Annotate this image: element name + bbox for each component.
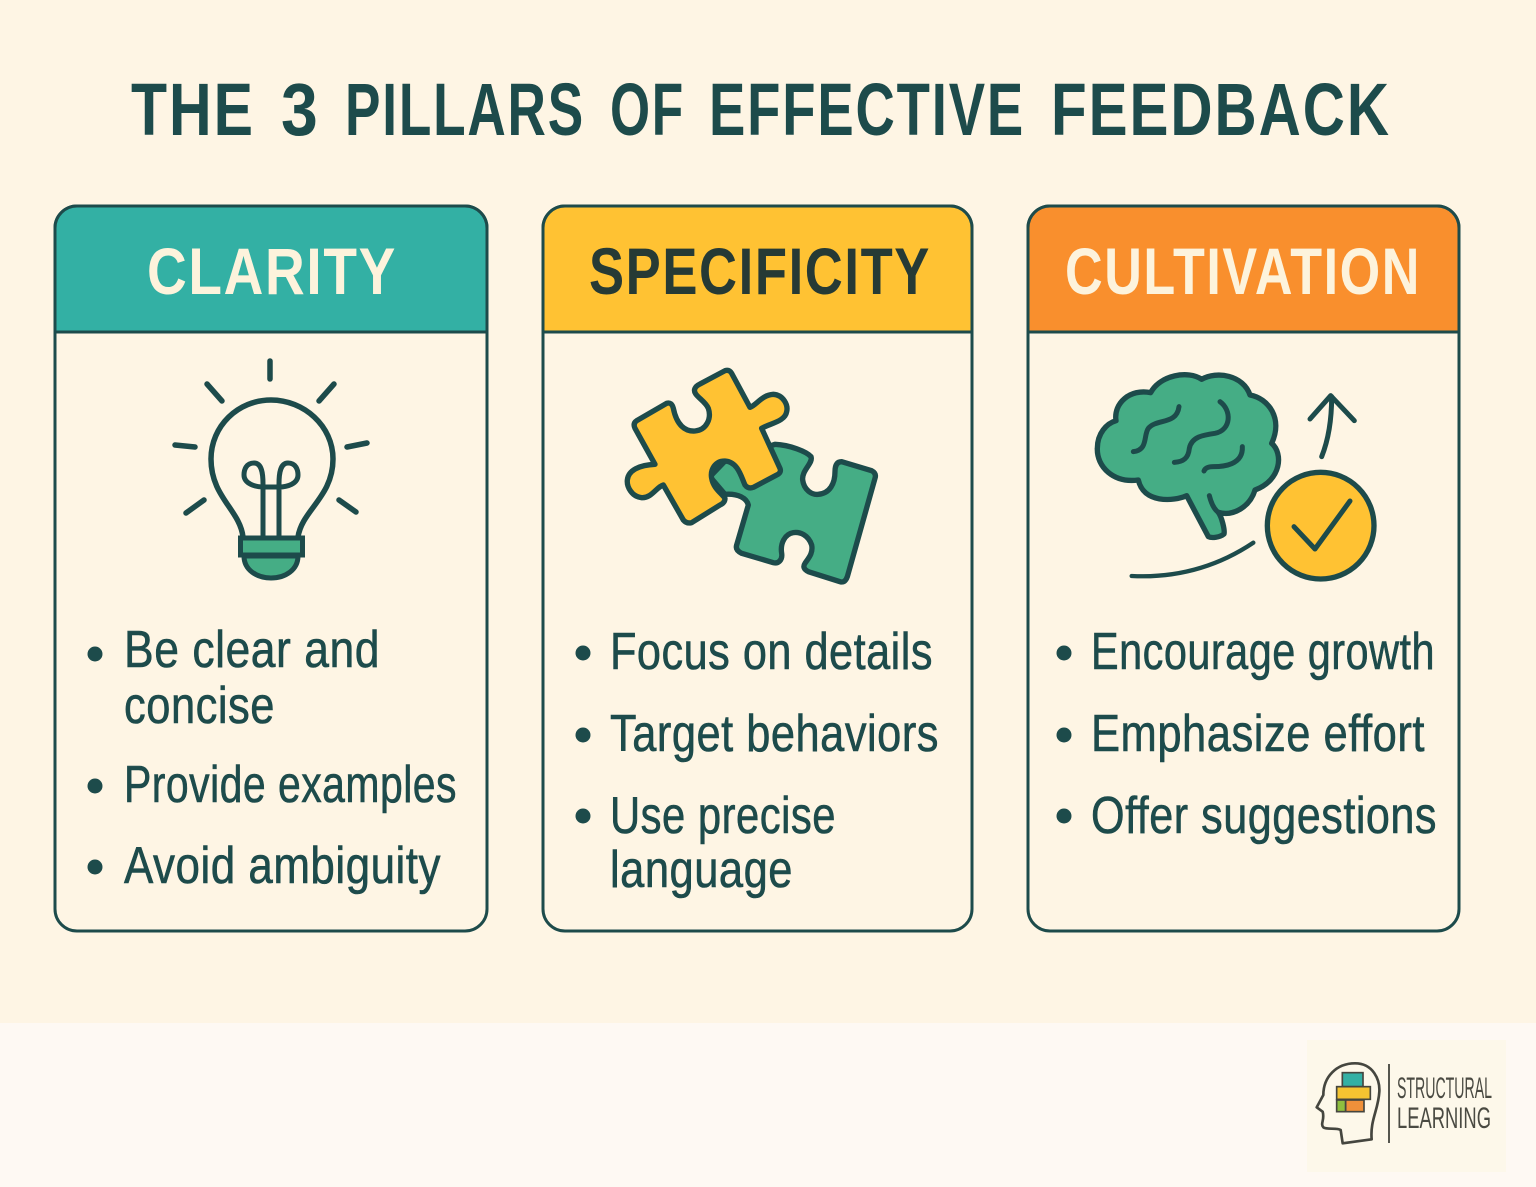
panel: cultivation bbox=[1028, 206, 1459, 931]
cultivation bullet list bbox=[1056, 623, 1437, 845]
icon: lightbulb bbox=[175, 361, 367, 578]
panel: clarity bbox=[55, 206, 487, 931]
title: THE bbox=[131, 68, 255, 151]
cultivation bullet list: Encourage growth bbox=[1091, 623, 1435, 681]
clarity bullet list: Provide examples bbox=[124, 756, 457, 814]
cultivation bullet list: Offer suggestions bbox=[1091, 787, 1437, 845]
specificity bullet list: Focus on details bbox=[610, 623, 933, 681]
specificity bullet list: language bbox=[610, 841, 793, 899]
specificity bullet list: Target behaviors bbox=[610, 705, 939, 763]
specificity bullet list: Use precise bbox=[610, 787, 836, 845]
clarity header bbox=[55, 206, 487, 332]
title: PILLARS bbox=[345, 68, 585, 151]
clarity bullet list bbox=[88, 621, 457, 895]
clarity bullet list: Avoid ambiguity bbox=[124, 837, 441, 895]
title: FEEDBACK bbox=[1051, 68, 1391, 151]
cultivation bullet list: Emphasize effort bbox=[1091, 705, 1425, 763]
title: EFFECTIVE bbox=[709, 68, 1025, 151]
icon: head with blocks bbox=[1317, 1063, 1379, 1143]
title bbox=[131, 68, 1391, 151]
icon: brain with check and growth arrow bbox=[1097, 375, 1374, 579]
title: OF bbox=[610, 68, 685, 151]
title: 3 bbox=[281, 68, 320, 151]
clarity bullet list: Be clear and bbox=[124, 621, 380, 679]
specificity bullet list bbox=[576, 623, 939, 899]
cultivation header bbox=[1028, 206, 1459, 332]
logo: Structural Learning bbox=[1307, 1040, 1506, 1172]
specificity header bbox=[543, 206, 972, 332]
panel: specificity bbox=[543, 206, 972, 931]
specificity header: SPECIFICITY bbox=[589, 234, 931, 308]
clarity bullet list: concise bbox=[124, 677, 275, 735]
cultivation header: CULTIVATION bbox=[1065, 234, 1421, 308]
logo wordmark bbox=[1397, 1072, 1492, 1135]
clarity header: CLARITY bbox=[147, 234, 397, 308]
icon: puzzle pieces bbox=[627, 370, 875, 582]
